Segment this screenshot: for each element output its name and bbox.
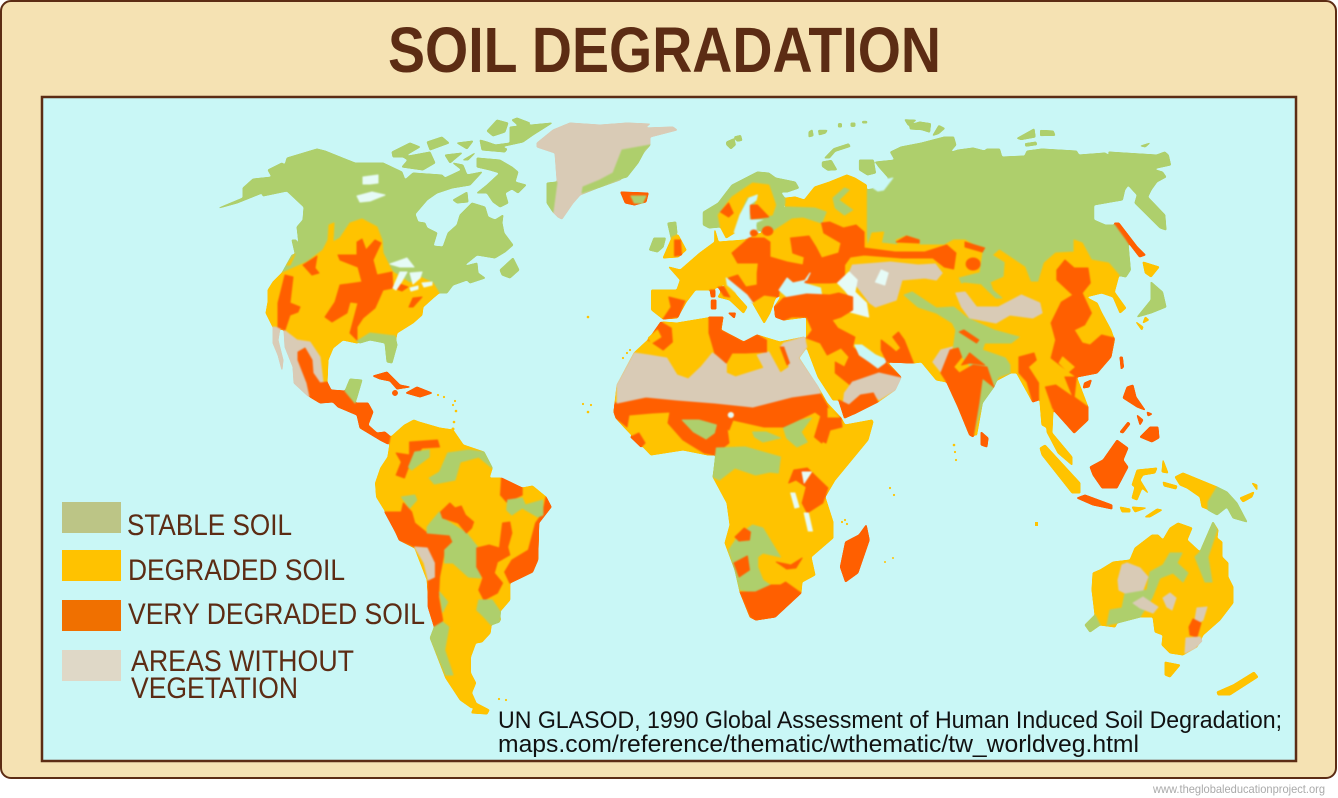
legend item: degraded soil: DEGRADED SOIL — [128, 554, 345, 587]
legend — [62, 502, 425, 705]
legend item: areas without vegetation — [62, 645, 354, 705]
legend item: very degraded soil: VERY DEGRADED SOIL — [128, 598, 425, 631]
source credit — [498, 707, 1282, 758]
source credit: maps.com/reference/thematic/wthematic/tw_worldveg.html — [498, 731, 1139, 758]
map: Australia and New Zealand — [1085, 522, 1258, 695]
panel: map ocean background — [42, 97, 1296, 761]
map: South America — [375, 420, 551, 714]
map: Eurasia — [621, 137, 1171, 447]
legend item: degraded soil — [62, 550, 345, 587]
map: North America — [219, 118, 552, 444]
title: SOIL DEGRADATION — [388, 14, 941, 86]
map: Southeast Asia islands — [1040, 385, 1257, 522]
source credit: UN GLASOD, 1990 Global Assessment of Human Induced Soil Degradation; — [498, 707, 1282, 734]
legend item: areas without vegetation: VEGETATION — [131, 672, 298, 705]
legend item: stable soil — [62, 502, 292, 542]
legend item: stable soil: STABLE SOIL — [127, 509, 292, 542]
legend item: areas without vegetation: AREAS WITHOUT — [131, 645, 354, 678]
map: Greenland — [537, 123, 677, 219]
map: Arctic islands — [726, 119, 1151, 171]
map: tiny island dots — [437, 316, 1038, 701]
world map — [219, 118, 1258, 714]
map: Africa — [614, 317, 873, 620]
watermark: www.theglobaleducationproject.org — [1152, 782, 1325, 796]
